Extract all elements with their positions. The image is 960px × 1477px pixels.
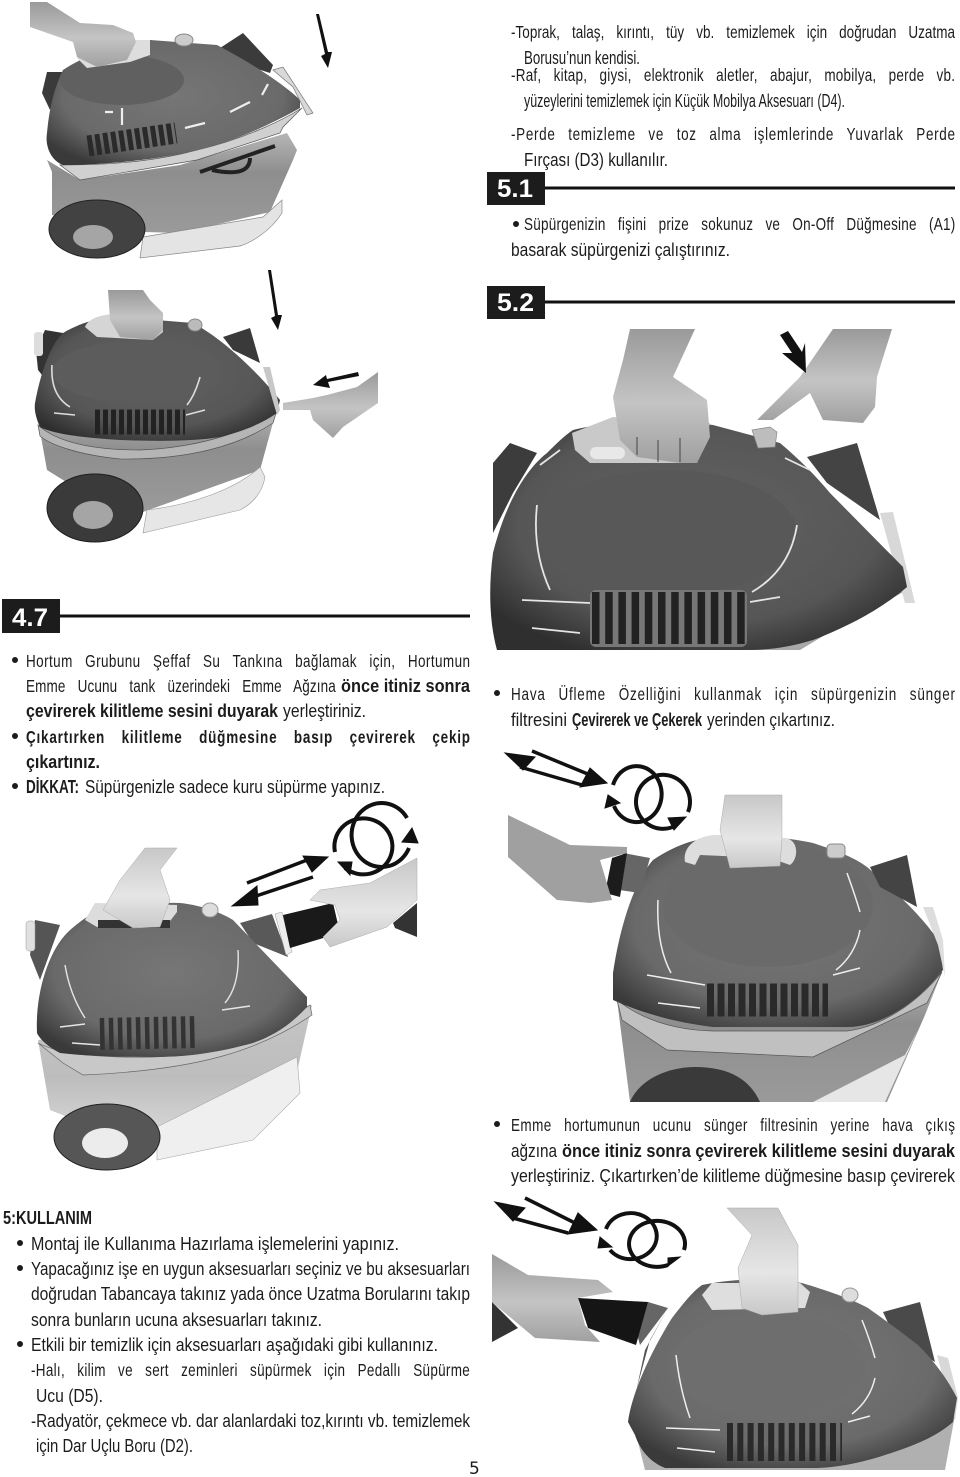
white base — [813, 1030, 918, 1102]
knob — [188, 319, 202, 331]
left cap — [26, 921, 35, 951]
icon: double arrow, hose — [232, 856, 328, 906]
wheel — [47, 474, 143, 542]
knob — [202, 903, 218, 917]
dome — [35, 317, 280, 441]
right handle — [273, 67, 313, 115]
text: step 4.7: Süpürgenizle sadece kuru süpürme yapınız. — [85, 777, 385, 797]
wheel — [630, 1067, 760, 1102]
dome — [613, 836, 943, 1027]
hand — [108, 290, 163, 340]
text: step 4.7 — [12, 652, 471, 797]
arrow: finger direction — [313, 372, 359, 388]
vents plate — [590, 590, 747, 647]
left port — [30, 920, 60, 980]
text: step 5.1: basarak süpürgenizi çalıştırınız. — [511, 240, 730, 260]
dome — [490, 421, 907, 650]
left port — [42, 72, 63, 110]
left port — [36, 330, 63, 385]
text: step 4.7: Emme Ucunu tank üzerindeki Emme Ağzına — [26, 677, 336, 697]
arrow: press down — [268, 270, 282, 330]
text: blower note: Çevirerek ve Çekerek — [572, 710, 703, 730]
vents — [707, 984, 828, 1016]
knob — [175, 34, 193, 46]
wheel hub — [82, 1128, 128, 1158]
recess — [671, 1312, 865, 1418]
vents — [95, 410, 185, 434]
vents — [727, 1423, 842, 1461]
text: step 4.7: önce itiniz sonra — [341, 676, 471, 696]
icon: rotation circles, sponge filter — [605, 766, 690, 830]
right port — [217, 33, 273, 73]
text: blower note: Hava Üfleme Özelliğini kullanmak için süpürgenizin sünger — [511, 684, 956, 705]
handle — [572, 417, 710, 463]
heading: 5.2: 5.2 — [497, 289, 534, 317]
right handle — [937, 1355, 958, 1420]
text: accessory list: Borusu’nun kendisi. — [524, 48, 640, 68]
right port — [223, 328, 260, 363]
right handle — [923, 907, 945, 977]
text: blower note: filtresini — [511, 710, 567, 730]
icon: rotation circles, final photo — [598, 1213, 685, 1267]
right port — [807, 443, 880, 520]
heading: 4.7: 4.7 — [12, 604, 48, 632]
text: step 4.7: yerleştiriniz. — [283, 701, 366, 721]
text: 5 KULLANIM section: Montaj ile Kullanıma Hazırlama işlemelerini yapınız. — [31, 1234, 399, 1254]
right port — [870, 855, 917, 907]
text: step 4.7: DİKKAT: — [26, 777, 79, 797]
holding hand — [720, 795, 782, 868]
right handle — [880, 512, 915, 603]
right port ring — [275, 912, 292, 955]
text: step 5.1: Süpürgenizin fişini prize sokunuz ve On-Off Düğmesine (A1) — [524, 215, 955, 235]
left hand — [508, 815, 627, 903]
handle opening — [590, 447, 625, 459]
arrow: lid down — [316, 14, 332, 68]
photo: pressing release button on closed vacuum — [34, 290, 378, 542]
dome recess — [60, 55, 184, 105]
holding hand — [103, 848, 177, 928]
text: 5 KULLANIM section: Yapacağınız işe en uygun aksesuarları seçiniz ve bu aksesuarları — [31, 1259, 470, 1279]
handle — [702, 1283, 810, 1310]
wheel hub — [73, 225, 113, 249]
filter ring — [619, 853, 650, 893]
heading: 5.1 — [487, 172, 955, 205]
inner rim — [60, 108, 302, 180]
photo: hose inserted into blower outlet — [508, 795, 945, 1102]
text: accessory list — [511, 23, 955, 170]
text: 5 KULLANIM section: için Dar Uçlu Boru (D2). — [36, 1436, 193, 1456]
text: hose note: Emme hortumunun ucunu sünger filtresinin yerine hava çıkış — [511, 1116, 955, 1136]
wheel — [54, 1104, 160, 1170]
text: step 5.1 — [511, 215, 955, 260]
photo: hose attached, blower use — [492, 1208, 958, 1470]
right port — [883, 1302, 935, 1362]
tank — [38, 1005, 312, 1150]
text: 5 KULLANIM section — [3, 1208, 471, 1456]
handle — [77, 40, 150, 68]
photo: vacuum lid being lowered onto tank — [30, 2, 313, 258]
photo: on-off button close-up — [490, 329, 915, 650]
highlights — [522, 450, 810, 633]
recess — [663, 843, 873, 967]
hose — [393, 903, 417, 937]
photo: hose connected on tank, side view — [26, 848, 417, 1170]
icon: rotation circles, hose — [334, 803, 418, 875]
left dome flange — [630, 1308, 668, 1420]
lower band — [635, 1415, 955, 1470]
text: 5 KULLANIM section: 5:KULLANIM — [3, 1208, 92, 1228]
text: hose note — [494, 1116, 956, 1186]
text: step 4.7: çevirerek kilitleme sesini duyarak — [26, 701, 279, 721]
white base — [143, 467, 265, 533]
holding hand — [613, 329, 710, 463]
holding hand — [727, 1208, 798, 1315]
handle — [685, 835, 796, 865]
wheel hub — [73, 501, 113, 529]
rim — [38, 410, 277, 459]
text: step 4.7: çıkartınız. — [26, 752, 100, 772]
handle — [85, 903, 177, 927]
vents — [100, 1032, 198, 1034]
text: accessory list: -Raf, kitap, giysi, elektronik aletler, abajur, mobilya, perde vb. — [511, 66, 955, 86]
text: accessory list: -Perde temizleme ve toz alma işlemlerinde Yuvarlak Perde — [511, 125, 955, 145]
right handle — [263, 367, 280, 415]
dome — [37, 903, 307, 1057]
finger creases — [637, 437, 680, 462]
text: 5 KULLANIM section: -Halı, kilim ve sert zeminleri süpürmek için Pedallı Süpürme — [31, 1361, 470, 1381]
tank — [38, 408, 277, 512]
dome — [628, 1279, 957, 1468]
handle shadow — [98, 920, 170, 928]
white base — [140, 200, 282, 258]
hose connector — [283, 903, 340, 948]
wheel — [49, 200, 145, 258]
vents — [592, 592, 747, 644]
white base — [157, 1057, 300, 1160]
text: 5 KULLANIM section: Etkili bir temizlik için aksesuarları aşağıdaki gibi kullanınız. — [31, 1335, 438, 1355]
rim — [617, 972, 942, 1057]
text: 5 KULLANIM section: doğrudan Tabancaya takınız yada önce Uzatma Borularını takıp — [31, 1284, 470, 1304]
black connector — [578, 1298, 648, 1345]
left cap — [34, 332, 43, 356]
pointing hand — [757, 329, 892, 423]
recess — [52, 342, 208, 402]
flexible hose — [492, 1302, 518, 1342]
highlights — [647, 873, 860, 1008]
vents — [88, 133, 176, 146]
right port — [240, 914, 288, 957]
handle — [85, 314, 163, 340]
arrow: button press — [780, 331, 806, 373]
connector ring — [636, 1302, 668, 1345]
black filter housing — [605, 853, 627, 897]
highlights — [60, 950, 250, 1045]
left hand — [492, 1254, 613, 1342]
text: 5 KULLANIM section: -Radyatör, çekmece vb. dar alanlardaki toz,kırıntı vb. temizlemek — [31, 1411, 471, 1431]
icon: double arrow, final photo — [495, 1198, 597, 1234]
text: hose note: ağzına — [511, 1141, 558, 1161]
hose hand — [310, 858, 417, 947]
tank — [617, 972, 942, 1102]
hand — [30, 2, 136, 67]
highlights — [52, 365, 205, 415]
text: step 4.7: Çıkartırken kilitleme düğmesine basıp çevirerek çekip — [26, 728, 470, 748]
text: accessory list: Fırçası (D3) kullanılır. — [524, 150, 668, 170]
rim — [493, 570, 907, 650]
highlights — [105, 84, 268, 128]
recess — [537, 470, 797, 596]
knob — [827, 844, 845, 858]
dark hose inside tank — [200, 146, 275, 172]
dome — [47, 40, 300, 165]
knob — [752, 427, 777, 448]
icon: double arrow, sponge filter — [505, 751, 607, 787]
rim — [38, 1005, 312, 1075]
text: accessory list: -Toprak, talaş, kırıntı, tüy vb. temizlemek için doğrudan Uzatma — [511, 23, 955, 43]
heading: 4.7 — [2, 599, 470, 633]
text: 5 KULLANIM section: Ucu (D5). — [36, 1386, 103, 1406]
text: step 4.7: Hortum Grubunu Şeffaf Su Tankına bağlamak için, Hortumun — [26, 652, 470, 672]
pointing hand — [283, 372, 378, 438]
left port — [493, 443, 537, 533]
knob — [842, 1288, 858, 1302]
highlights — [666, 1320, 875, 1452]
tank — [47, 133, 297, 233]
text: blower note: yerinden çıkartınız. — [707, 710, 835, 730]
text: 5 KULLANIM section: sonra bunların ucuna aksesuarları takınız. — [31, 1310, 322, 1330]
heading: 5.1: 5.1 — [497, 175, 533, 203]
text: blower note — [494, 684, 956, 730]
heading: 5.2 — [487, 286, 955, 319]
